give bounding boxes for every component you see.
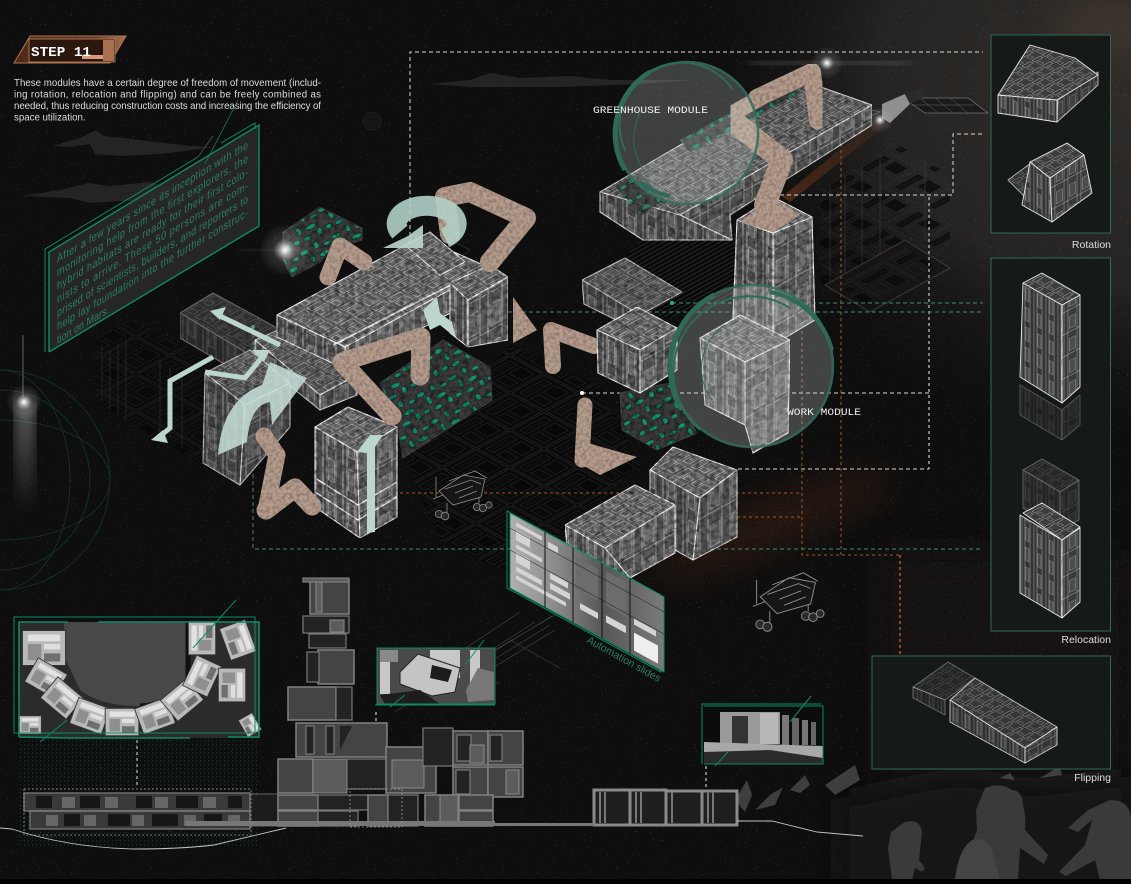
- module: flipping: [913, 662, 1057, 763]
- automation slide: [507, 511, 664, 672]
- intro paragraph: [14, 78, 321, 124]
- label: rotation: Rotation: [1072, 239, 1111, 251]
- arrow: axis front: [151, 357, 213, 443]
- lens: greenhouse module: [615, 61, 759, 205]
- elevation drawing: [24, 578, 737, 835]
- floor: slide projection lines: [380, 612, 560, 712]
- arrow: small rotation: [423, 297, 456, 338]
- floor wireframes: [95, 143, 950, 712]
- orange light streaks: [782, 118, 882, 202]
- module: rotation top: [998, 45, 1098, 122]
- skewed green story panel: hybrid habitats are ready for their first colo-: [57, 166, 248, 293]
- cross bar: [255, 325, 357, 410]
- label: relocation: Relocation: [1061, 634, 1111, 646]
- intro paragraph: space utilization.: [14, 112, 86, 124]
- greenhouse assembly: [582, 78, 872, 345]
- dashed leader lines: [137, 52, 983, 787]
- module: rotation bottom: [1008, 143, 1092, 222]
- skewed green story panel: [45, 100, 259, 352]
- intro paragraph: needed, thus reducing construction costs and increasing the efficiency of: [14, 101, 321, 112]
- intro paragraph: ing rotation, relocation and flipping) and can be freely combined as: [14, 90, 321, 100]
- green module: work: [620, 383, 697, 450]
- skewed green story panel: prised of scientists, builders, and reporters to: [57, 193, 248, 320]
- robot arms: left cluster: [264, 192, 637, 510]
- left module cluster: [180, 207, 508, 538]
- satellite: [850, 87, 988, 123]
- central bar: [277, 232, 490, 369]
- skewed green story panel: help lay foundation into the further construc-: [57, 206, 248, 334]
- green module: large: [380, 340, 492, 458]
- skewed green story panel: After a few years since its inception with the: [57, 139, 248, 266]
- arrow: axis right: [205, 350, 270, 378]
- clouds: [22, 73, 690, 203]
- intro paragraph: These modules have a certain degree of freedom of movement (includ-: [14, 78, 321, 89]
- inset: crater plan: [14, 600, 262, 742]
- long lower rows: [24, 793, 495, 829]
- tower: [278, 578, 523, 797]
- green frames: [14, 617, 255, 733]
- label: flipping: Flipping: [1074, 772, 1111, 784]
- skewed green story panel: monitoring help from the first explorers, the: [57, 152, 248, 280]
- arrow: fan rotation: [218, 362, 307, 455]
- block: front bar: [565, 485, 675, 578]
- faint planet: [0, 370, 110, 590]
- floor: back-left slab: [265, 235, 470, 360]
- end block: [450, 265, 508, 347]
- astronaut silhouettes: [888, 785, 1131, 880]
- crater: [64, 622, 190, 706]
- step badge: STEP 11: [31, 45, 91, 61]
- bottom strip: [0, 879, 1131, 884]
- block: stack: [650, 447, 737, 560]
- slide caption: Automation slides: [585, 634, 663, 685]
- floor: under greenhouse: [590, 230, 735, 325]
- floor: central: [400, 345, 640, 575]
- floor: upper right: [820, 143, 950, 312]
- mid rear module: [582, 258, 682, 332]
- label: work module: WORK MODULE: [787, 407, 861, 419]
- arrow: axis back: [210, 307, 280, 345]
- work assembly: [565, 307, 790, 578]
- lens flares: [240, 47, 910, 276]
- panel: flipping: [872, 656, 1111, 784]
- block: in lens: [700, 315, 790, 453]
- support column: [733, 197, 815, 345]
- inset: elevation close-up: [702, 696, 823, 766]
- rocket launch: [6, 335, 42, 510]
- green module: rear: [283, 207, 362, 277]
- panel: rotation: [991, 35, 1111, 251]
- module: relocation top: [1020, 273, 1080, 440]
- step badge: [14, 36, 126, 63]
- left block: [203, 350, 290, 485]
- lens: work module: [670, 284, 834, 448]
- long greenhouse bar: [600, 78, 872, 240]
- front column: [315, 407, 397, 538]
- moon: [363, 112, 381, 130]
- dashed selection boxes: [24, 789, 251, 835]
- label: greenhouse module: GREENHOUSE MODULE: [593, 105, 708, 117]
- second rover: [753, 573, 824, 631]
- module: relocation bottom: [1020, 459, 1080, 618]
- arms on greenhouse: [735, 72, 818, 232]
- floor: left wing: [95, 318, 262, 470]
- arrow: column lift: [357, 435, 383, 533]
- panel: relocation: [991, 258, 1111, 646]
- right units: [493, 790, 737, 826]
- inset: module close-up: [375, 640, 495, 707]
- ground line: [0, 821, 863, 849]
- skewed green story panel: nists to arrive. These 50 persons are com-: [57, 179, 248, 307]
- movement arrows: [151, 206, 457, 533]
- ghost rear module: [180, 293, 290, 382]
- ring of modules: [19, 620, 262, 737]
- green data grid: [19, 740, 259, 848]
- arrow: top rotation: [383, 206, 457, 248]
- skewed green story panel: tion on Mars.: [57, 303, 109, 347]
- rover: [433, 471, 492, 520]
- mountains: [735, 765, 1131, 884]
- block: upper left: [597, 307, 677, 393]
